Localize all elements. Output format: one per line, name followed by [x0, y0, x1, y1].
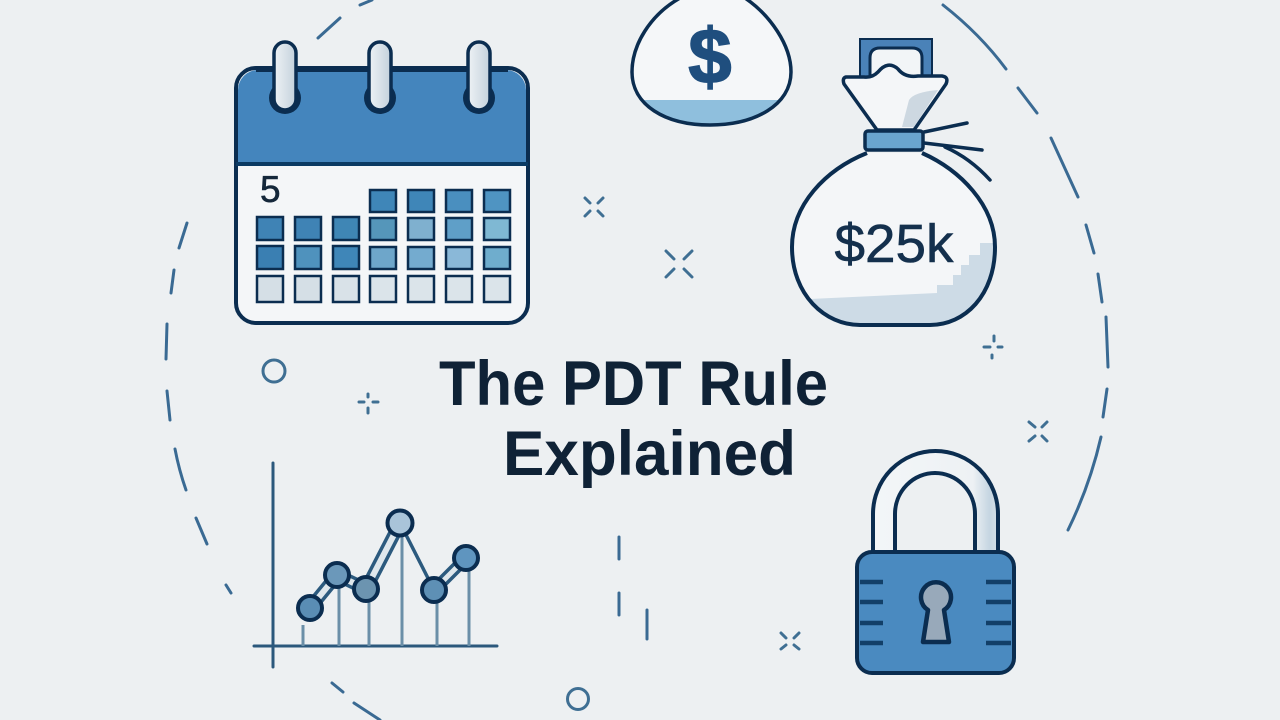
bag body: [792, 153, 995, 325]
line chart: [254, 463, 497, 667]
decorative rings and sparkles: [263, 198, 1047, 710]
dashed orbit circle: [166, 0, 1108, 720]
chart stems: [303, 535, 469, 646]
lock body: [857, 552, 1014, 673]
keyhole: [921, 582, 951, 642]
dollar sign: $: [688, 12, 732, 100]
calendar date number: 5: [260, 169, 281, 210]
bag tie band: [865, 131, 923, 150]
calendar body: [236, 68, 528, 323]
bag neck: [843, 65, 947, 130]
calendar header: [238, 70, 526, 163]
bag amount: $25k: [834, 214, 955, 274]
title: [439, 349, 828, 489]
icon: money bag $25k: [792, 39, 1000, 335]
title line 2: Explained: [503, 419, 796, 489]
calendar rings: [269, 42, 495, 114]
icon: small dollar bag: [630, 0, 795, 128]
calendar day grid: [257, 190, 510, 302]
lock side bars: [860, 582, 1011, 643]
chart axes: [254, 463, 497, 667]
infographic canvas: [164, 0, 1110, 720]
title line 1: The PDT Rule: [439, 349, 828, 419]
banknote tab: [860, 39, 932, 81]
bag strings: [924, 123, 990, 180]
icon: calendar: [236, 42, 528, 323]
liquid fill: [644, 100, 778, 124]
lock shackle: [873, 451, 998, 554]
chart line: [310, 523, 466, 608]
chart markers: [298, 510, 478, 620]
icon: padlock: [857, 451, 1014, 673]
